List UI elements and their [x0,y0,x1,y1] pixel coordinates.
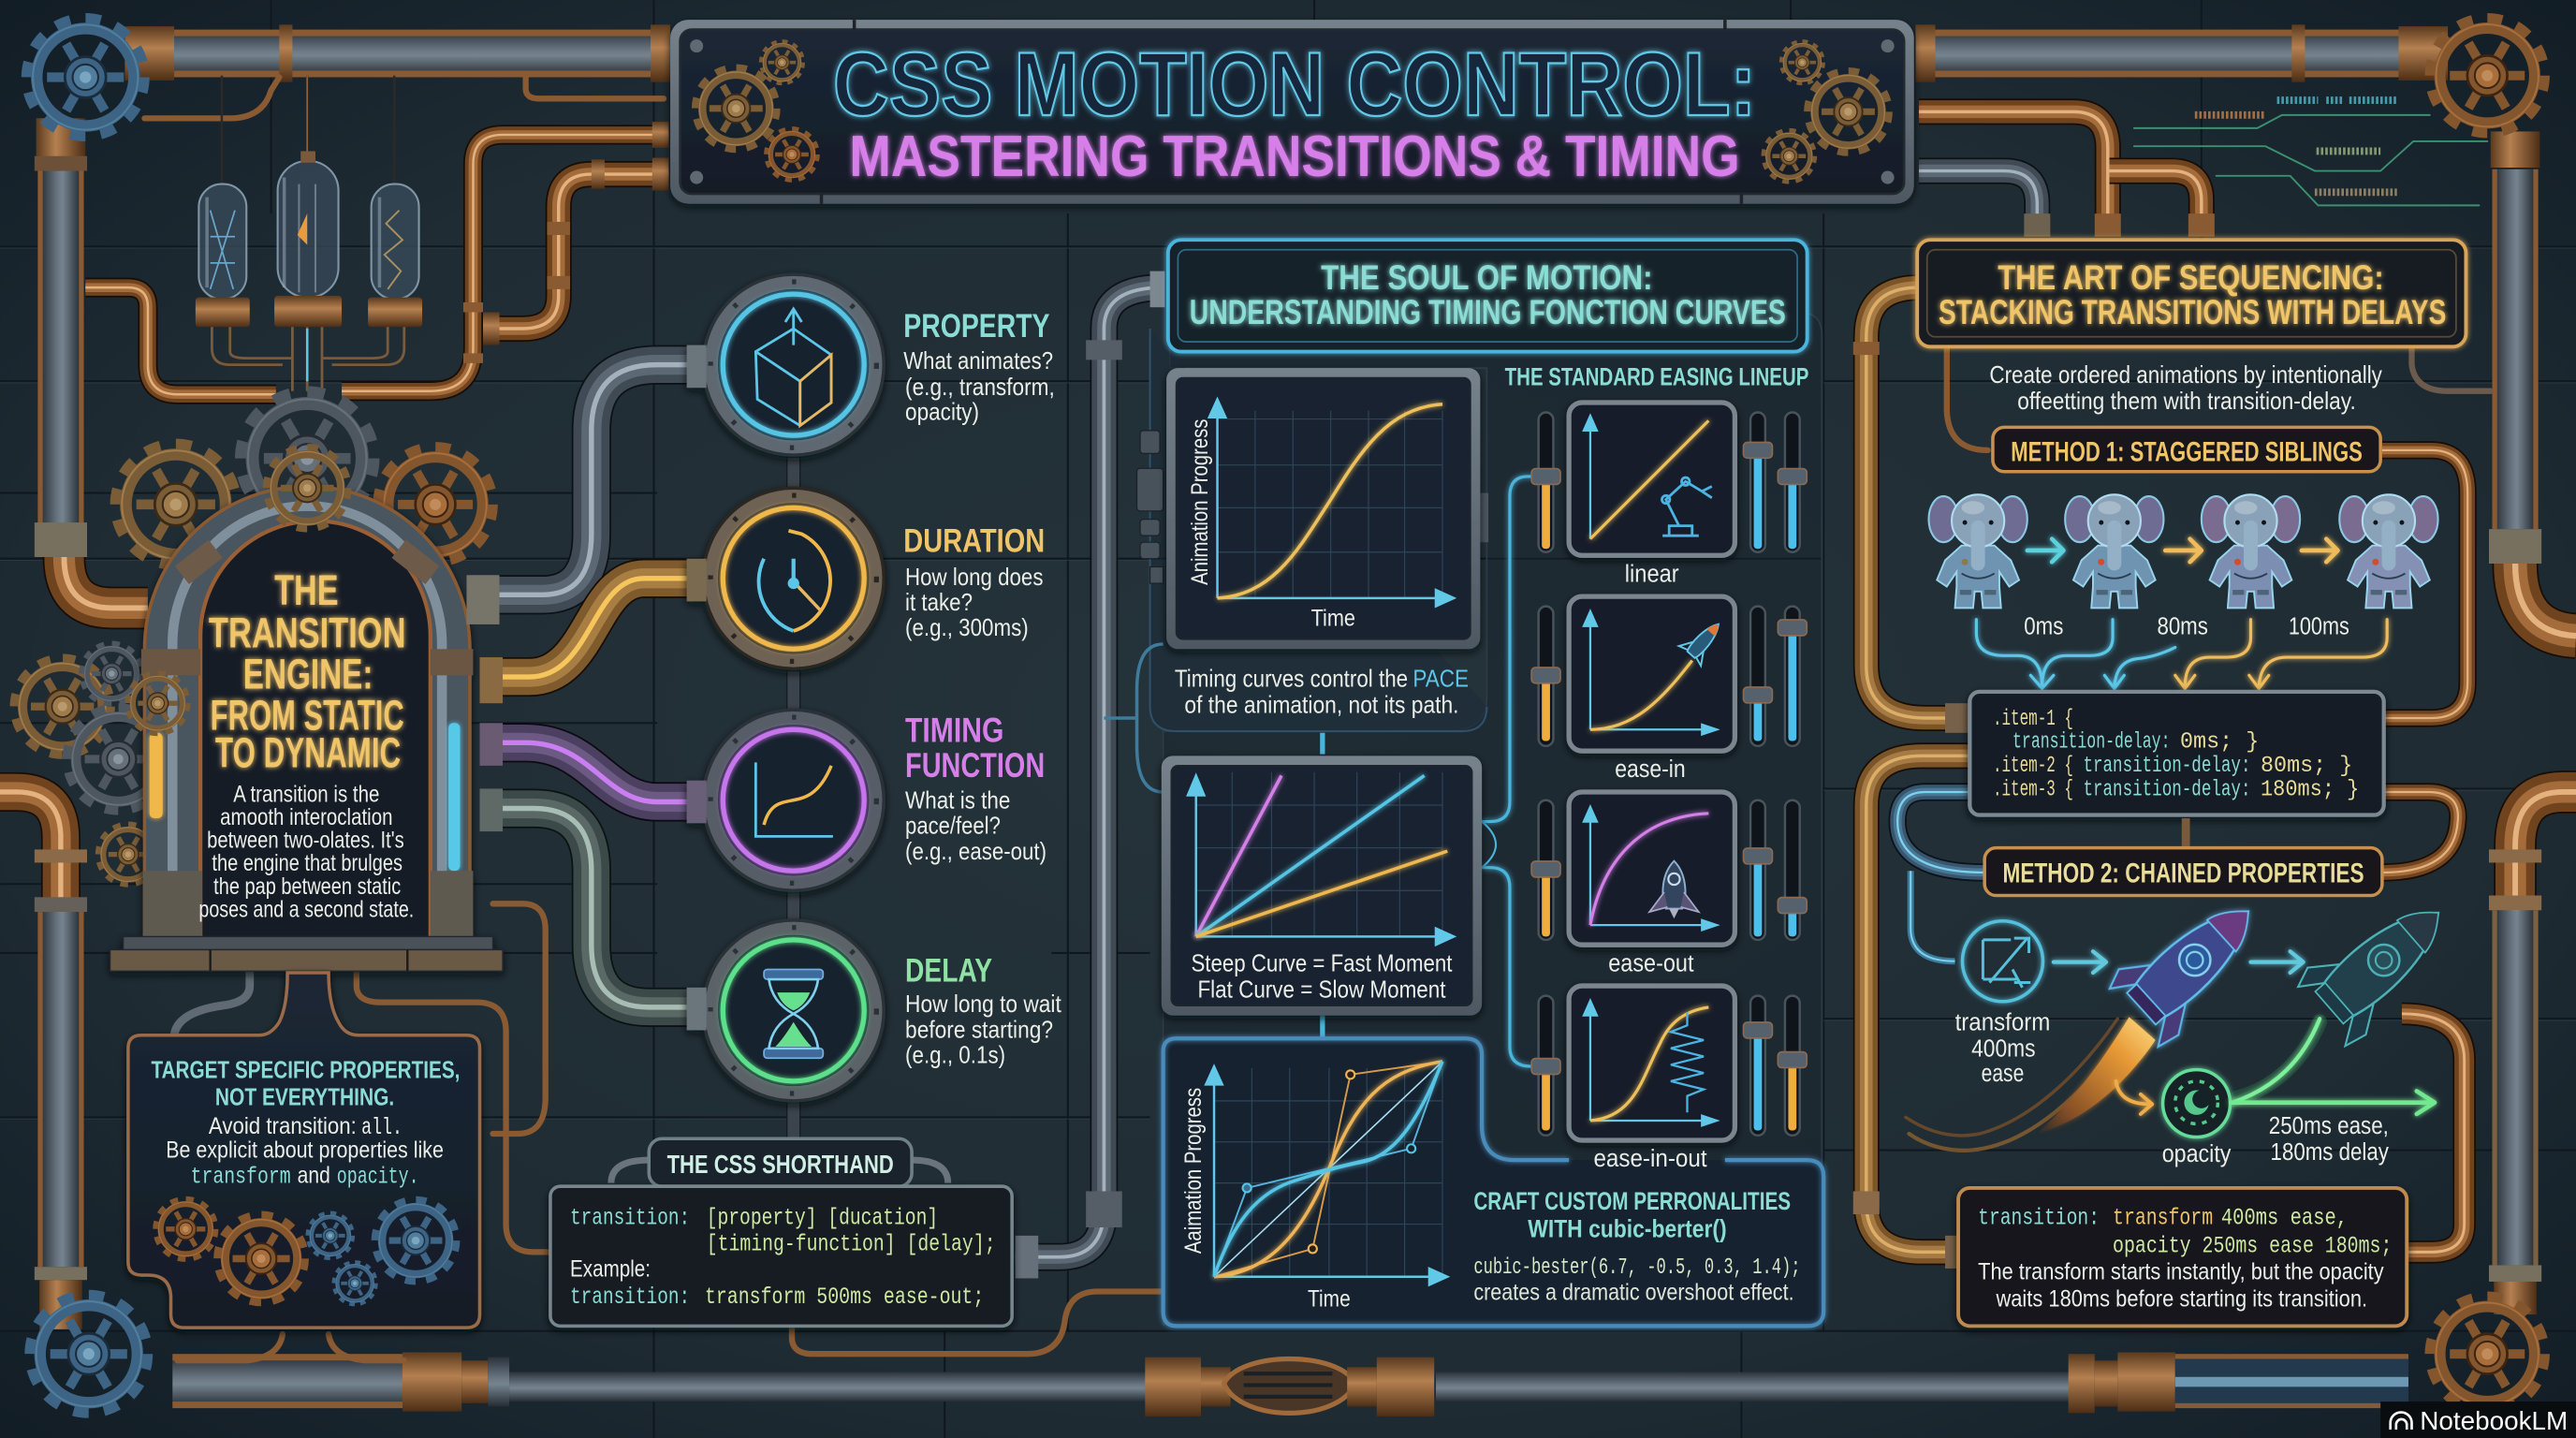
shorthand code panel: [property] [ducation] [707,1207,938,1232]
transform labels: ease [1982,1059,2024,1087]
curve section title: THE SOUL OF MOTION: [1321,258,1653,297]
engine description: poses and a second state. [198,897,414,922]
transform labels: transform [1955,1007,2050,1035]
chart: steep vs flat: Flat Curve = Slow Moment [1197,976,1445,1003]
label: duration: it take? [905,590,973,616]
transition code panel: The transform starts instantly, but the opacity [1978,1259,2384,1284]
title line 2: MASTERING TRANSITIONS & TIMING [849,125,1740,189]
title gears [696,42,1888,182]
sequencing intro: offeetting them with transition-delay. [2017,389,2356,415]
label: delay: DELAY [905,953,992,990]
pipe: timing purple [500,742,690,801]
small linking marks [1104,431,1536,1066]
gears: left lower cluster [15,644,168,884]
engine title: THE [274,566,339,614]
transition code panel: waits 180ms before starting its transition. [1996,1286,2367,1312]
amber glass tube [150,733,163,818]
callout text: NOT EVERYTHING. [215,1082,394,1110]
label: duration: How long does [905,565,1043,591]
shorthand code panel: transform 500ms ease-out; [705,1285,984,1311]
method 2 pill [1984,848,2382,896]
label: delay [905,953,1061,1069]
stem [2182,818,2190,846]
engine title: ENGINE: [243,650,373,697]
icon: small rocket [1679,614,1730,666]
chart: steep vs flat: Steep Curve = Fast Moment [1191,950,1453,976]
label: delay: How long to wait [905,991,1061,1018]
dial: timing function [687,710,884,890]
sequencing code panel: .item-3 { [1993,777,2073,802]
label: property: opacity) [905,399,979,425]
shorthand pill: THE CSS SHORTHAND [667,1150,894,1179]
easing labels [1593,559,1707,1172]
title banner [670,20,1914,204]
label: property: PROPERTY [903,308,1050,345]
callout text: Avoid transition: [209,1114,357,1139]
easing labels: linear [1625,559,1679,587]
opacity labels [2162,1111,2390,1167]
pipe: shorthand to curves [1016,271,1164,1278]
transition code panel: 400ms ease, [2221,1207,2348,1232]
bezier text: WITH cubic-berter() [1528,1214,1727,1243]
watermark: NotebookLM [2420,1406,2568,1435]
rocket: ghost teal [2291,879,2467,1049]
label: timing function: FUNCTION [905,746,1045,785]
shorthand code panel: Example: [570,1257,651,1283]
callout text: Be explicit about properties like [166,1137,444,1163]
opacity labels: opacity [2162,1139,2232,1167]
shorthand code panel: transition: [570,1285,690,1311]
gear: top-left corner [28,20,143,135]
transition code panel: transform [2113,1207,2213,1232]
rocket flame green [2232,1019,2320,1103]
icon: robot arm [1661,477,1712,536]
engine description: the engine that brulges [212,851,402,876]
transition code panel [1958,1188,2407,1326]
chart: animation progress: Animation Progress [1188,419,1213,585]
gear: engine hub [268,448,347,528]
chart caption [1175,667,1469,719]
pipes: right section copper [1853,111,2467,1269]
label: property: What animates? [903,348,1053,374]
engine title: TRANSITION [209,609,406,657]
gears: crown above engine [117,393,491,564]
method 1 pill [1993,427,2380,472]
pipe: left vertical lower [0,792,87,1329]
gear: small engine side [128,674,187,733]
vacuum tubes cluster [196,76,422,391]
panel: custom bezier: Time [1308,1286,1351,1312]
icon: upright rocket [1649,861,1699,918]
engine description [198,782,414,922]
chart caption: of the animation, not its path. [1184,693,1459,719]
pipe: duration amber [500,579,690,677]
label: property: (e.g., transform, [905,374,1055,401]
sequencing section title: THE ART OF SEQUENCING: [1998,258,2384,297]
label: timing function: What is the [905,788,1010,814]
method 2 pill: METHOD 2: CHAINED PROPERTIES [2002,858,2364,888]
stems between dials [787,457,800,1140]
callout text: and [298,1164,330,1189]
opacity icon [2163,1070,2231,1137]
arrows from opacity [2116,1081,2435,1114]
sequencing code panel: .item-1 { [1993,707,2073,732]
bezier text: creates a dramatic overshoot effect. [1473,1280,1794,1305]
dial: delay [687,920,884,1101]
sequencing code panel: transition-delay: [2083,754,2250,779]
sliders [1531,413,1807,1136]
shorthand code panel: transition: [570,1207,690,1232]
curve section title [1168,240,1808,352]
shorthand code panel: [timing-function] [delay]; [707,1233,996,1258]
bezier text [1473,1186,1801,1305]
transform labels [1955,1007,2050,1087]
dial: property [687,274,884,455]
transform icon [1962,921,2042,1002]
easing: linear [1569,403,1734,555]
dial: duration [687,488,884,668]
pipe: bottom main with valve [172,1352,2408,1416]
shorthand code panel [550,1186,1012,1326]
engine description: between two-olates. It's [207,829,404,854]
label: timing function: TIMING [905,711,1003,749]
sequencing code panel: 80ms; } [2261,754,2352,779]
callout text: TARGET SPECIFIC PROPERTIES, [151,1055,460,1083]
engine description: the pap between static [213,874,401,900]
engine title: FROM STATIC [211,691,404,739]
chart: steep vs flat [1162,756,1482,1016]
label: duration: (e.g., 300ms) [905,615,1029,641]
chart: animation progress: Time [1311,607,1355,632]
callout text [151,1055,460,1191]
sequencing code panel: transition-delay: [2083,777,2250,802]
sequencing code panel: .item-2 { [1993,754,2073,779]
chart caption: Timing curves control the [1175,667,1408,693]
panel: custom bezier: Aaimation Progress [1181,1088,1207,1254]
easing: ease-in-out [1569,986,1734,1140]
pipe: property steel [500,365,690,594]
engine title: TO DYNAMIC [215,729,401,777]
elephants row [1928,494,2438,608]
label: delay: before starting? [905,1017,1053,1043]
title line 1: CSS MOTION CONTROL: [833,35,1756,135]
pipe: delay steel-green [500,809,690,1007]
delay labels: 0ms [2024,611,2063,639]
sequencing intro [1989,362,2382,415]
rocket flame [1906,1017,2156,1151]
circuit traces top right [2134,100,2487,205]
easing: ease-out [1569,792,1734,945]
panel: custom bezier [1164,1038,1823,1326]
delay labels: 80ms [2157,611,2208,639]
engine description: A transition is the [233,782,379,807]
callout text: opacity. [337,1166,419,1191]
gear: top-right corner [2431,20,2543,132]
chart: animation progress [1166,368,1480,649]
gear: bottom-left corner [31,1297,146,1412]
transform labels: 400ms [1971,1034,2036,1063]
arrows between elephants [2027,539,2338,562]
delay labels: 100ms [2289,611,2349,639]
shorthand pill [611,1138,948,1186]
sequencing code panel: transition-delay: [2012,730,2170,756]
label: duration: DURATION [903,523,1045,560]
opacity labels: 250ms ease, [2269,1111,2389,1139]
label: timing function [905,711,1046,865]
sequencing code panel [1969,692,2384,815]
pipe: right vertical upper [2489,131,2576,636]
bezier text: cubic-bester(6.7, -0.5, 0.3, 1.4); [1473,1255,1801,1281]
label: duration [903,523,1045,641]
pipes from the central engine [85,122,668,394]
delay labels [2024,611,2349,639]
label: timing function: pace/feel? [905,814,1001,840]
label: delay: (e.g., 0.1s) [905,1043,1005,1069]
pipe: top-right main [1915,24,2448,82]
easing labels: ease-in-out [1593,1144,1707,1172]
pipe: left vertical upper [35,118,148,608]
arrows around rockets [2054,951,2304,973]
chart caption: PACE [1412,667,1469,693]
easing: ease-in [1569,596,1734,751]
callout text: transform [191,1166,291,1191]
engine description: amooth interoclation [220,805,392,830]
rocket: purple [2101,878,2278,1050]
central section backing [1150,312,1822,1325]
watermark [2380,1401,2576,1438]
gear: bottom-right corner [2431,1298,2543,1410]
flanges at engine side [466,575,503,831]
callout gears [156,1199,456,1304]
pipe: right vertical lower [2489,792,2576,1314]
transition code panel: opacity 250ms ease 180ms; [2113,1234,2392,1259]
sequencing code panel: 180ms; } [2261,777,2359,802]
easing labels: ease-in [1615,755,1686,783]
engine: arch body [110,487,503,971]
pipe: top-left main [124,24,670,82]
label: property [903,308,1055,425]
sequencing section title [1917,240,2466,346]
callout: target specific properties [128,973,479,1328]
bezier text: CRAFT CUSTOM PERRONALITIES [1473,1186,1791,1215]
transition code panel: transition: [1978,1207,2100,1232]
cyan glass tube [448,723,460,871]
method 1 pill: METHOD 1: STAGGERED SIBLINGS [2011,436,2363,467]
label: timing function: (e.g., ease-out) [905,839,1046,865]
opacity labels: 180ms delay [2271,1137,2390,1166]
easing lineup heading: THE STANDARD EASING LINEUP [1505,362,1808,391]
callout text: all. [361,1116,402,1141]
icon: spring [1671,1012,1704,1112]
engine title [209,566,406,777]
arrows to code [1976,620,2387,688]
sequencing code panel: 0ms; } [2180,730,2259,756]
easing labels: ease-out [1608,948,1694,976]
sequencing intro: Create ordered animations by intentionally [1989,362,2382,389]
curve section title: UNDERSTANDING TIMING FONCTION CURVES [1190,293,1786,331]
